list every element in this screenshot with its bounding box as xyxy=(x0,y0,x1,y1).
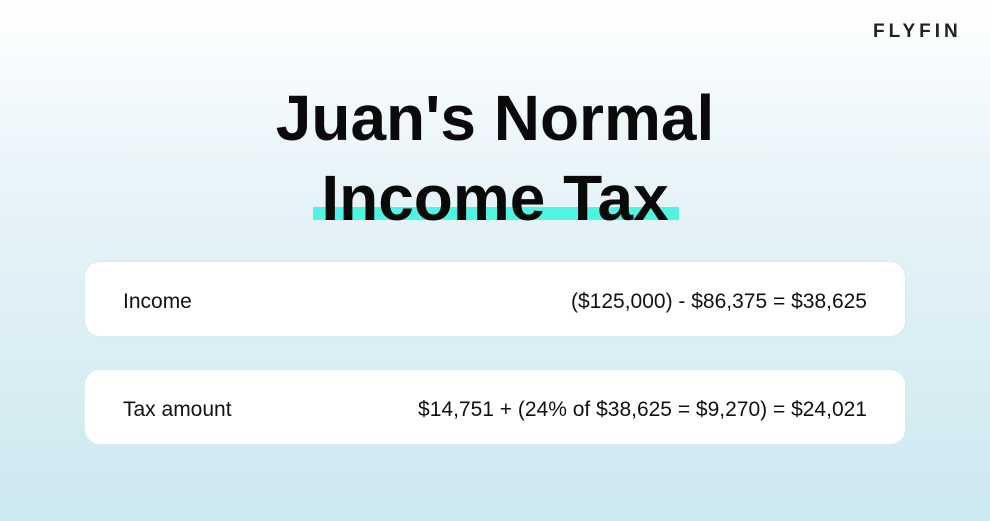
card: tax amount xyxy=(84,369,906,445)
card: income: ($125,000) - $86,375 = $38,625 xyxy=(571,290,867,313)
card: tax amount: Tax amount xyxy=(123,398,232,421)
card: tax amount: $14,751 + (24% of $38,625 = $9,270) = $24,021 xyxy=(418,398,867,421)
title: Juan's Normal xyxy=(276,82,714,154)
card: income: Income xyxy=(123,290,192,313)
title xyxy=(276,82,714,234)
logo: FLYFIN xyxy=(873,21,962,42)
card: income xyxy=(84,261,906,337)
title highlight line: Income Tax xyxy=(321,162,669,234)
